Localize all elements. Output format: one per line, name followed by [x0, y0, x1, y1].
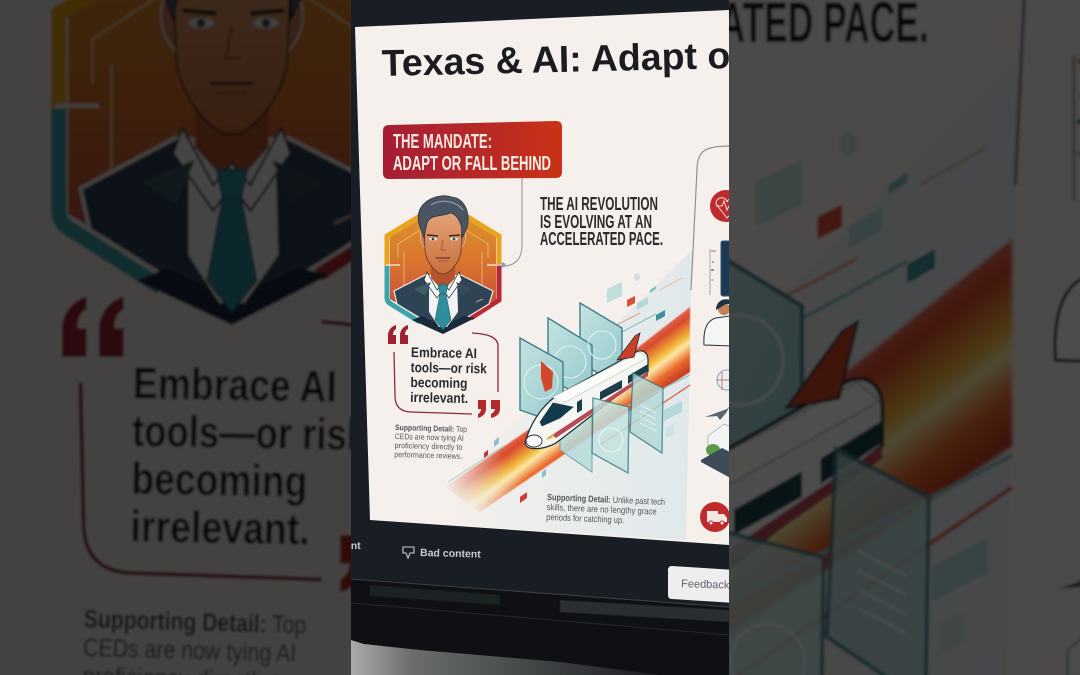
- enlarged quote text: becoming: [131, 454, 308, 507]
- quote text: irrelevant.: [410, 389, 468, 406]
- mandate banner: ADAPT OR FALL BEHIND: [393, 153, 551, 175]
- supporting detail: no grace periods: skills, there are no lengthy grace: [546, 502, 657, 517]
- panel: left blurred zoom background: [0, 0, 351, 675]
- panel: central phone view of the screen: [351, 0, 729, 675]
- illustration: speed train, portrait and icons: [386, 146, 742, 540]
- supporting detail: performance reviews: proficiency directly to: [394, 441, 463, 452]
- enlarged quote text: irrelevant.: [130, 502, 310, 555]
- quote text: Embrace AI: [411, 344, 477, 361]
- supporting detail: performance reviews: CEDs are now tying AI: [395, 432, 464, 443]
- feedback button: [668, 566, 735, 603]
- quote text: tools—or risk: [411, 359, 487, 376]
- headline: AI revolution: IS EVOLVING AT AN: [540, 212, 652, 232]
- headline: AI revolution: THE AI REVOLUTION: [540, 194, 658, 214]
- quote text: becoming: [410, 374, 468, 391]
- enlarged supporting detail: CEDs are now tying AI: [83, 634, 297, 668]
- button: bad content: Bad content: [420, 547, 481, 561]
- supporting detail: no grace periods: periods for catching up.: [546, 512, 624, 525]
- headline: AI revolution: ACCELERATED PACE.: [540, 229, 663, 249]
- headline: AI revolution: [540, 197, 662, 245]
- enlarged supporting detail: Supporting Detail: Top: [83, 605, 307, 640]
- supporting detail: performance reviews: Supporting Detail: Top: [395, 423, 468, 434]
- mandate banner: [383, 121, 562, 179]
- supporting detail: performance reviews: performance reviews.: [394, 450, 462, 461]
- enlarged quote text: [132, 366, 351, 546]
- mandate banner: THE MANDATE:: [393, 131, 492, 153]
- supporting detail: no grace periods: Supporting Detail: Unlike past tech: [547, 492, 665, 507]
- supporting detail: no grace periods: [546, 494, 664, 525]
- supporting detail: performance reviews: [394, 424, 467, 459]
- enlarged quote text: Embrace AI: [133, 359, 337, 412]
- quote text: [410, 347, 487, 403]
- title: Texas & AI: Adapt or Fall Behind: [381, 29, 958, 84]
- enlarged quote text: tools—or risk: [132, 406, 368, 460]
- screen bezel and keyboard: [351, 578, 729, 675]
- infographic page on screen: [355, 10, 729, 545]
- button: good content fragment: Content: [321, 540, 361, 552]
- feedback button: Feedback: [681, 578, 730, 592]
- enlarged supporting detail: [82, 605, 307, 675]
